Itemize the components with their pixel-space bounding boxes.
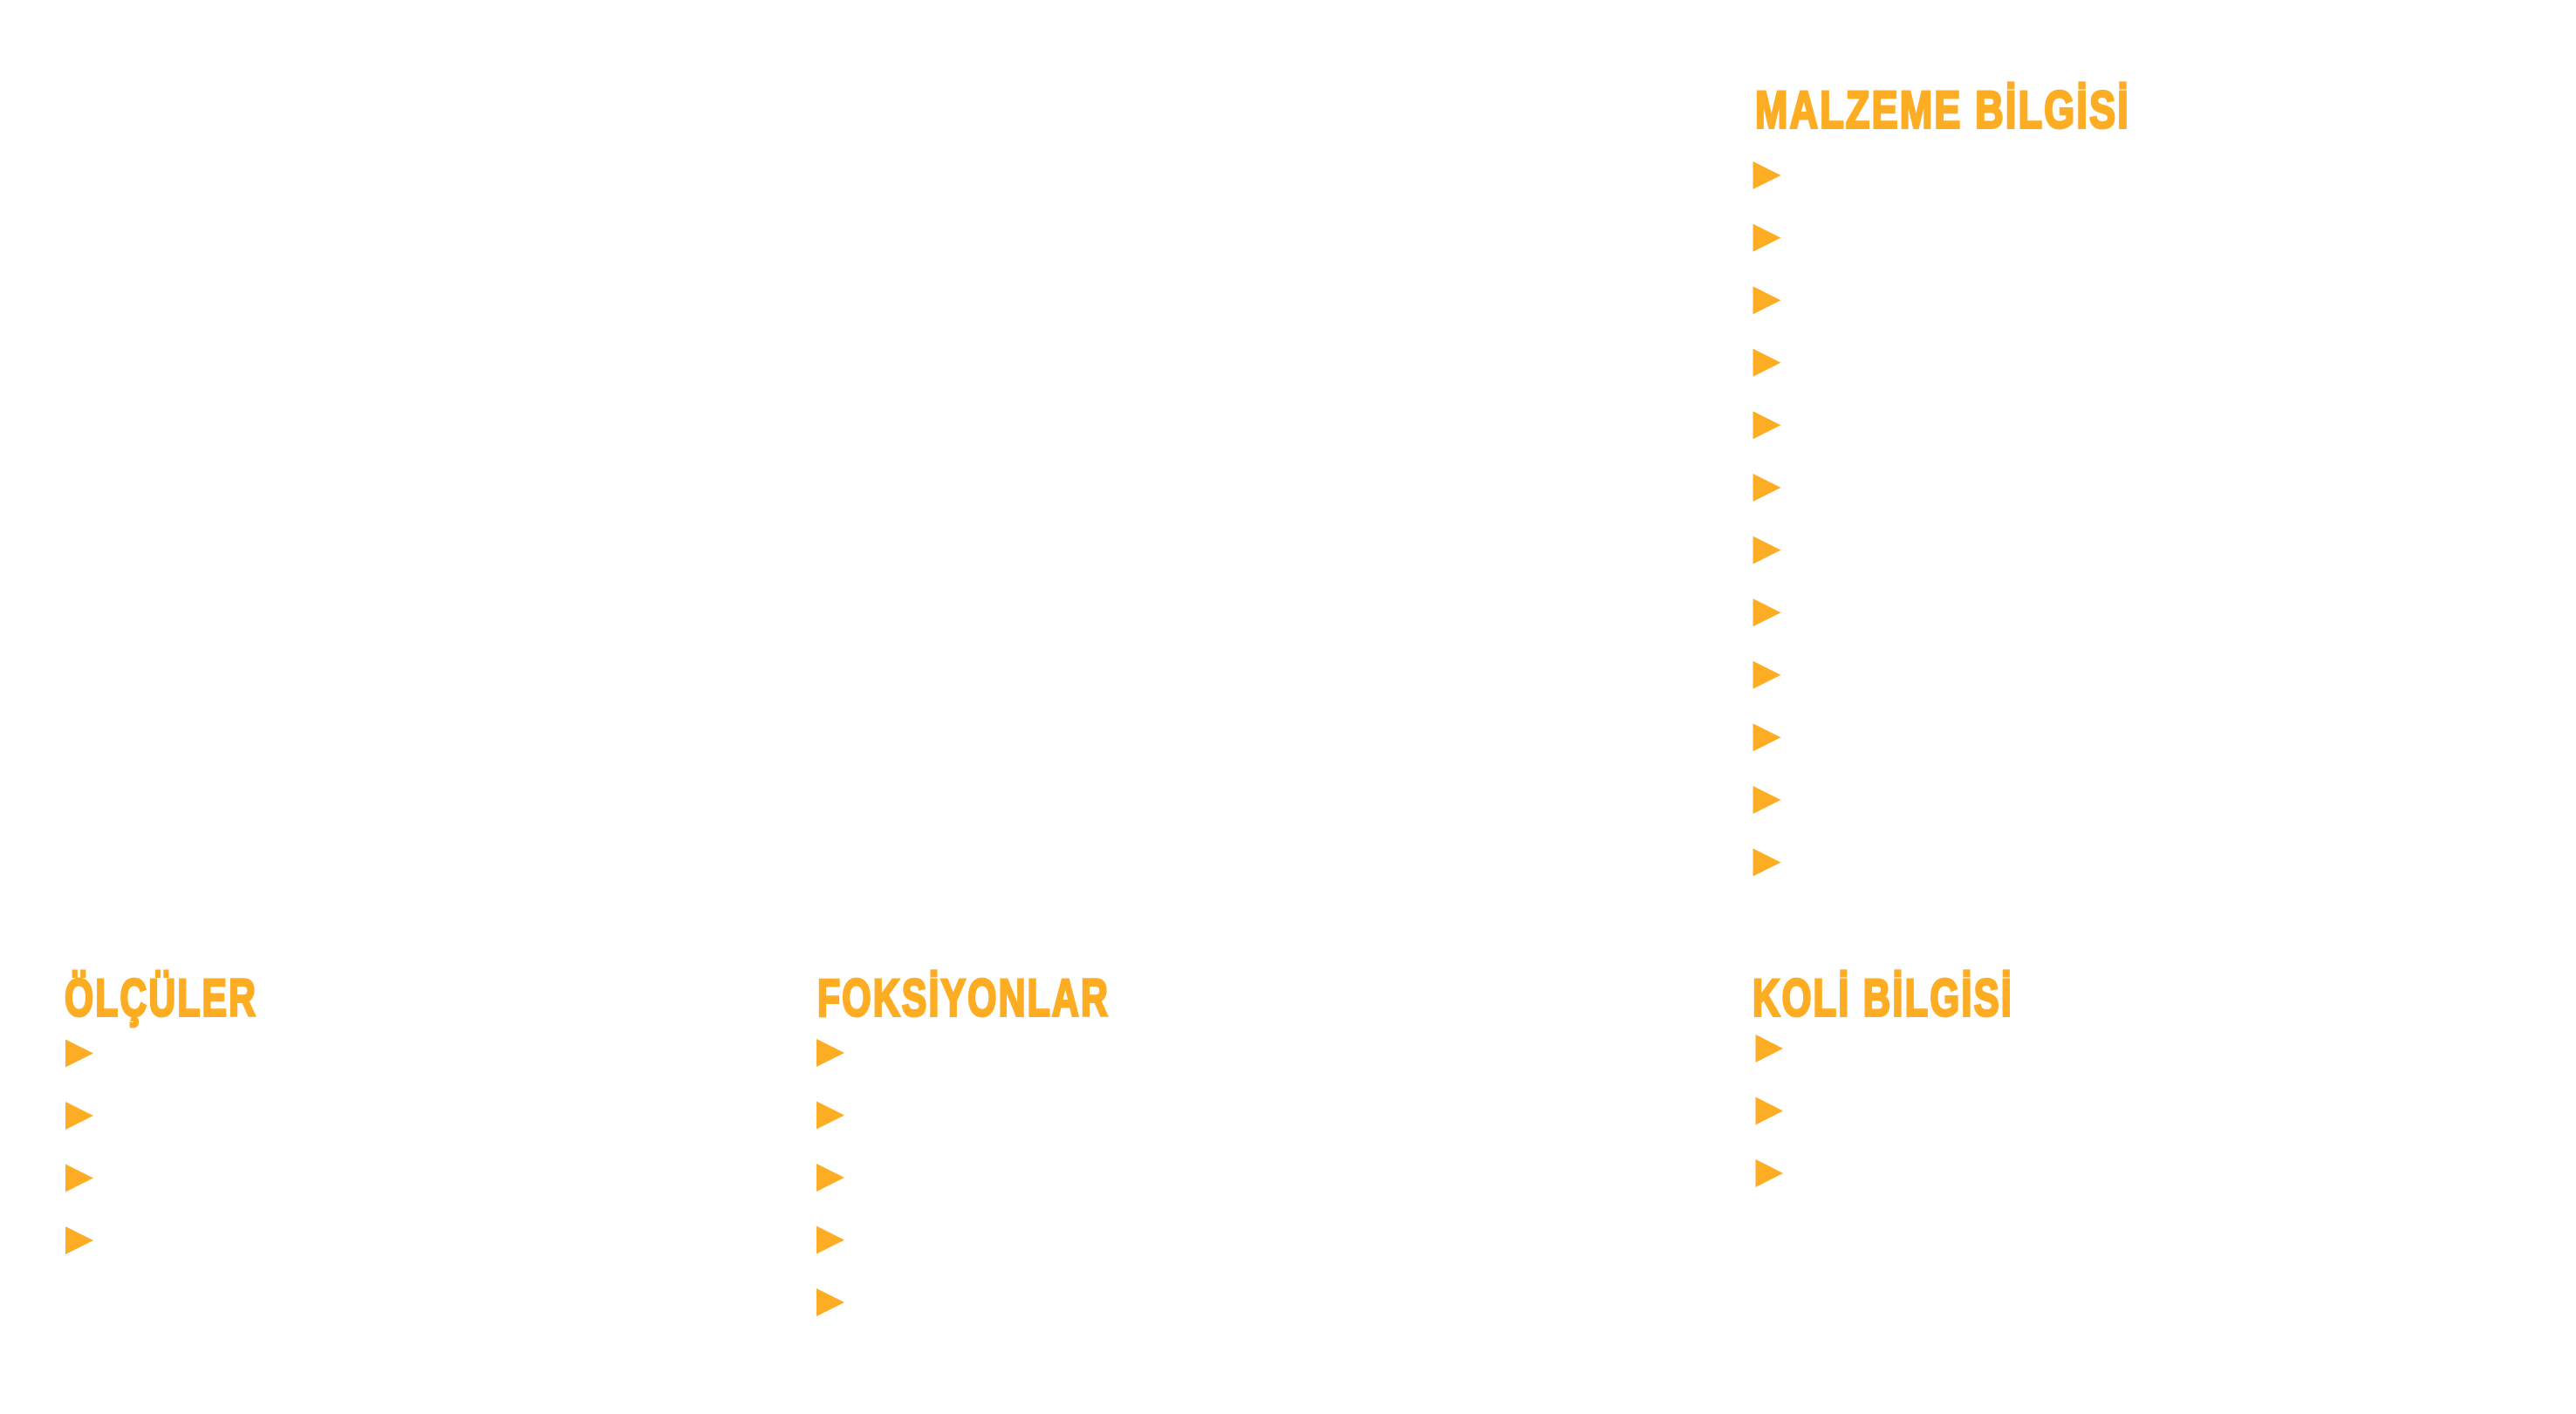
heading: malzeme bilgisi: MALZEME BİLGİSİ bbox=[1755, 80, 2130, 140]
panel: olculer bbox=[65, 968, 257, 1254]
bullet markers: foksiyonlar bbox=[817, 1039, 844, 1316]
panel: foksiyonlar bbox=[817, 968, 1110, 1316]
bullet markers: koli bilgisi bbox=[1755, 1035, 1783, 1187]
bullet markers: olculer bbox=[65, 1040, 93, 1254]
panel: koli bilgisi bbox=[1753, 968, 2013, 1187]
heading: foksiyonlar: FOKSİYONLAR bbox=[817, 968, 1110, 1028]
bullet markers: malzeme bilgisi bbox=[1753, 161, 1781, 877]
panel: malzeme bilgisi bbox=[1753, 80, 2130, 877]
heading: koli bilgisi: KOLİ BİLGİSİ bbox=[1753, 968, 2013, 1028]
heading: olculer: ÖLÇÜLER bbox=[65, 968, 257, 1028]
